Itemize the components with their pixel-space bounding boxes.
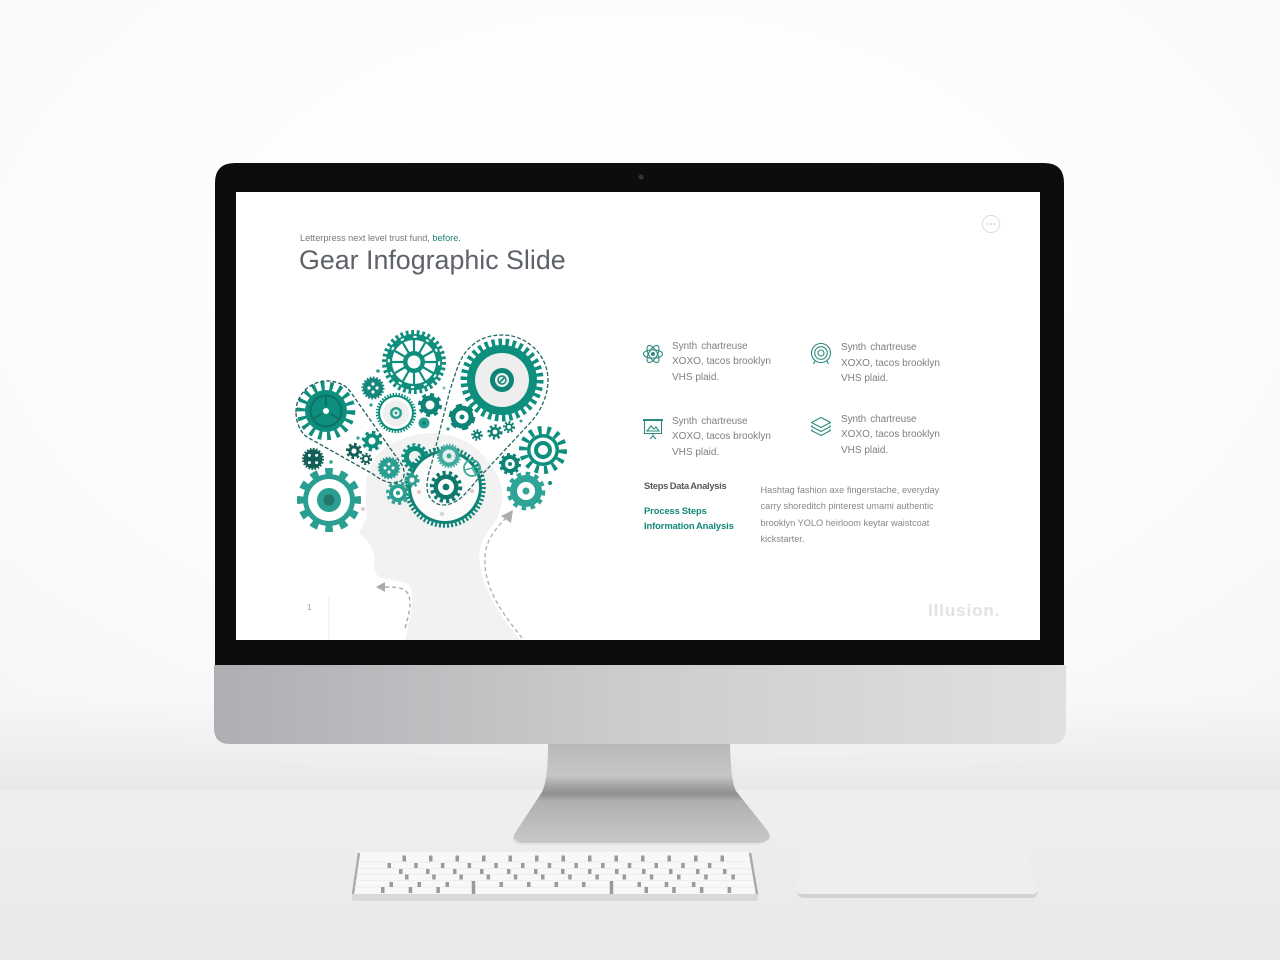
text block 3: XOXO, tacos brooklyn xyxy=(672,431,771,442)
text block 3: Synth chartreuse xyxy=(672,416,748,426)
gear: dotted light xyxy=(378,458,400,478)
gear: inside right xyxy=(464,460,480,476)
gears: center left cluster xyxy=(347,432,381,464)
paragraph: Hashtag fashion axe fingerstache, everyday xyxy=(760,485,939,495)
gear: small disc xyxy=(418,418,430,428)
gears: trio of small cogs xyxy=(472,422,514,440)
paragraph: kickstarter. xyxy=(760,534,804,544)
keyboard xyxy=(352,852,758,901)
text block 4: XOXO, tacos brooklyn xyxy=(841,429,940,440)
text block 2: VHS plaid. xyxy=(841,373,888,384)
steps highlight: Information Analysis xyxy=(644,520,734,530)
monitor chin xyxy=(214,665,1066,744)
page number divider xyxy=(328,596,330,640)
menu icon xyxy=(982,215,1000,233)
arrow: right dashed xyxy=(485,510,522,638)
gear: lower middle light xyxy=(388,482,408,504)
text block 2: XOXO, tacos brooklyn xyxy=(841,358,940,368)
belt left xyxy=(296,381,404,483)
paragraph: brooklyn YOLO heirloom keytar waistcoat xyxy=(760,518,929,528)
text block 2 xyxy=(841,342,940,384)
text block 1: XOXO, tacos brooklyn xyxy=(672,356,771,367)
icon: target xyxy=(810,343,832,364)
title: Gear Infographic Slide xyxy=(299,245,566,275)
monitor bezel xyxy=(215,163,1064,665)
gear: top spoked xyxy=(384,332,444,392)
icon: atom xyxy=(643,344,663,364)
icon: layers xyxy=(811,417,831,436)
gear head illustration xyxy=(295,330,567,640)
gear: fine tooth ring xyxy=(378,394,414,432)
brand mark: Illusion. xyxy=(928,601,1000,620)
gear: right small xyxy=(500,454,520,474)
gear: big upper right xyxy=(465,343,539,417)
text block 3 xyxy=(672,416,771,458)
gear: small in head xyxy=(406,474,418,486)
trackpad xyxy=(797,853,1038,898)
gear: small dotted top xyxy=(362,378,384,398)
gear: inside dark xyxy=(432,473,460,501)
gear: inside top light xyxy=(438,445,460,467)
gear: overlapping left xyxy=(403,445,427,469)
text block 4 xyxy=(841,414,940,456)
text block 4: Synth chartreuse xyxy=(841,414,916,424)
gear: large brain gear xyxy=(406,448,484,526)
arrow: left dashed xyxy=(376,582,410,628)
steps highlight xyxy=(644,505,734,531)
subtitle: Letterpress next level trust fund, before. xyxy=(300,233,461,243)
text block 4: VHS plaid. xyxy=(841,444,888,456)
gear: left with dark disc xyxy=(301,386,351,436)
text block 2: Synth chartreuse xyxy=(841,342,916,353)
steps heading: Steps Data Analysis xyxy=(644,480,726,491)
gear: cog near top xyxy=(420,395,440,415)
paragraph: carry shoreditch pinterest umami authentic xyxy=(760,501,934,511)
gear: hexagon cog xyxy=(450,406,474,428)
gear: right sun cog xyxy=(523,430,563,470)
text block 1 xyxy=(672,340,771,382)
icon: presentation board xyxy=(643,419,663,440)
webcam xyxy=(638,174,644,180)
page number: 1 xyxy=(307,603,311,612)
scattered dots xyxy=(329,369,552,516)
steps highlight: Process Steps xyxy=(644,505,707,516)
screen slide xyxy=(236,192,1040,640)
monitor stand xyxy=(513,744,770,845)
gear: lower left light xyxy=(297,468,361,532)
text block 1: VHS plaid. xyxy=(672,372,719,382)
text block 1: Synth chartreuse xyxy=(672,340,748,352)
paragraph xyxy=(760,485,940,544)
belt right xyxy=(427,335,548,505)
gear: dark dotted left xyxy=(303,449,323,469)
head silhouette xyxy=(359,433,522,640)
gear: right light xyxy=(508,474,544,508)
text block 3: VHS plaid. xyxy=(672,446,719,458)
